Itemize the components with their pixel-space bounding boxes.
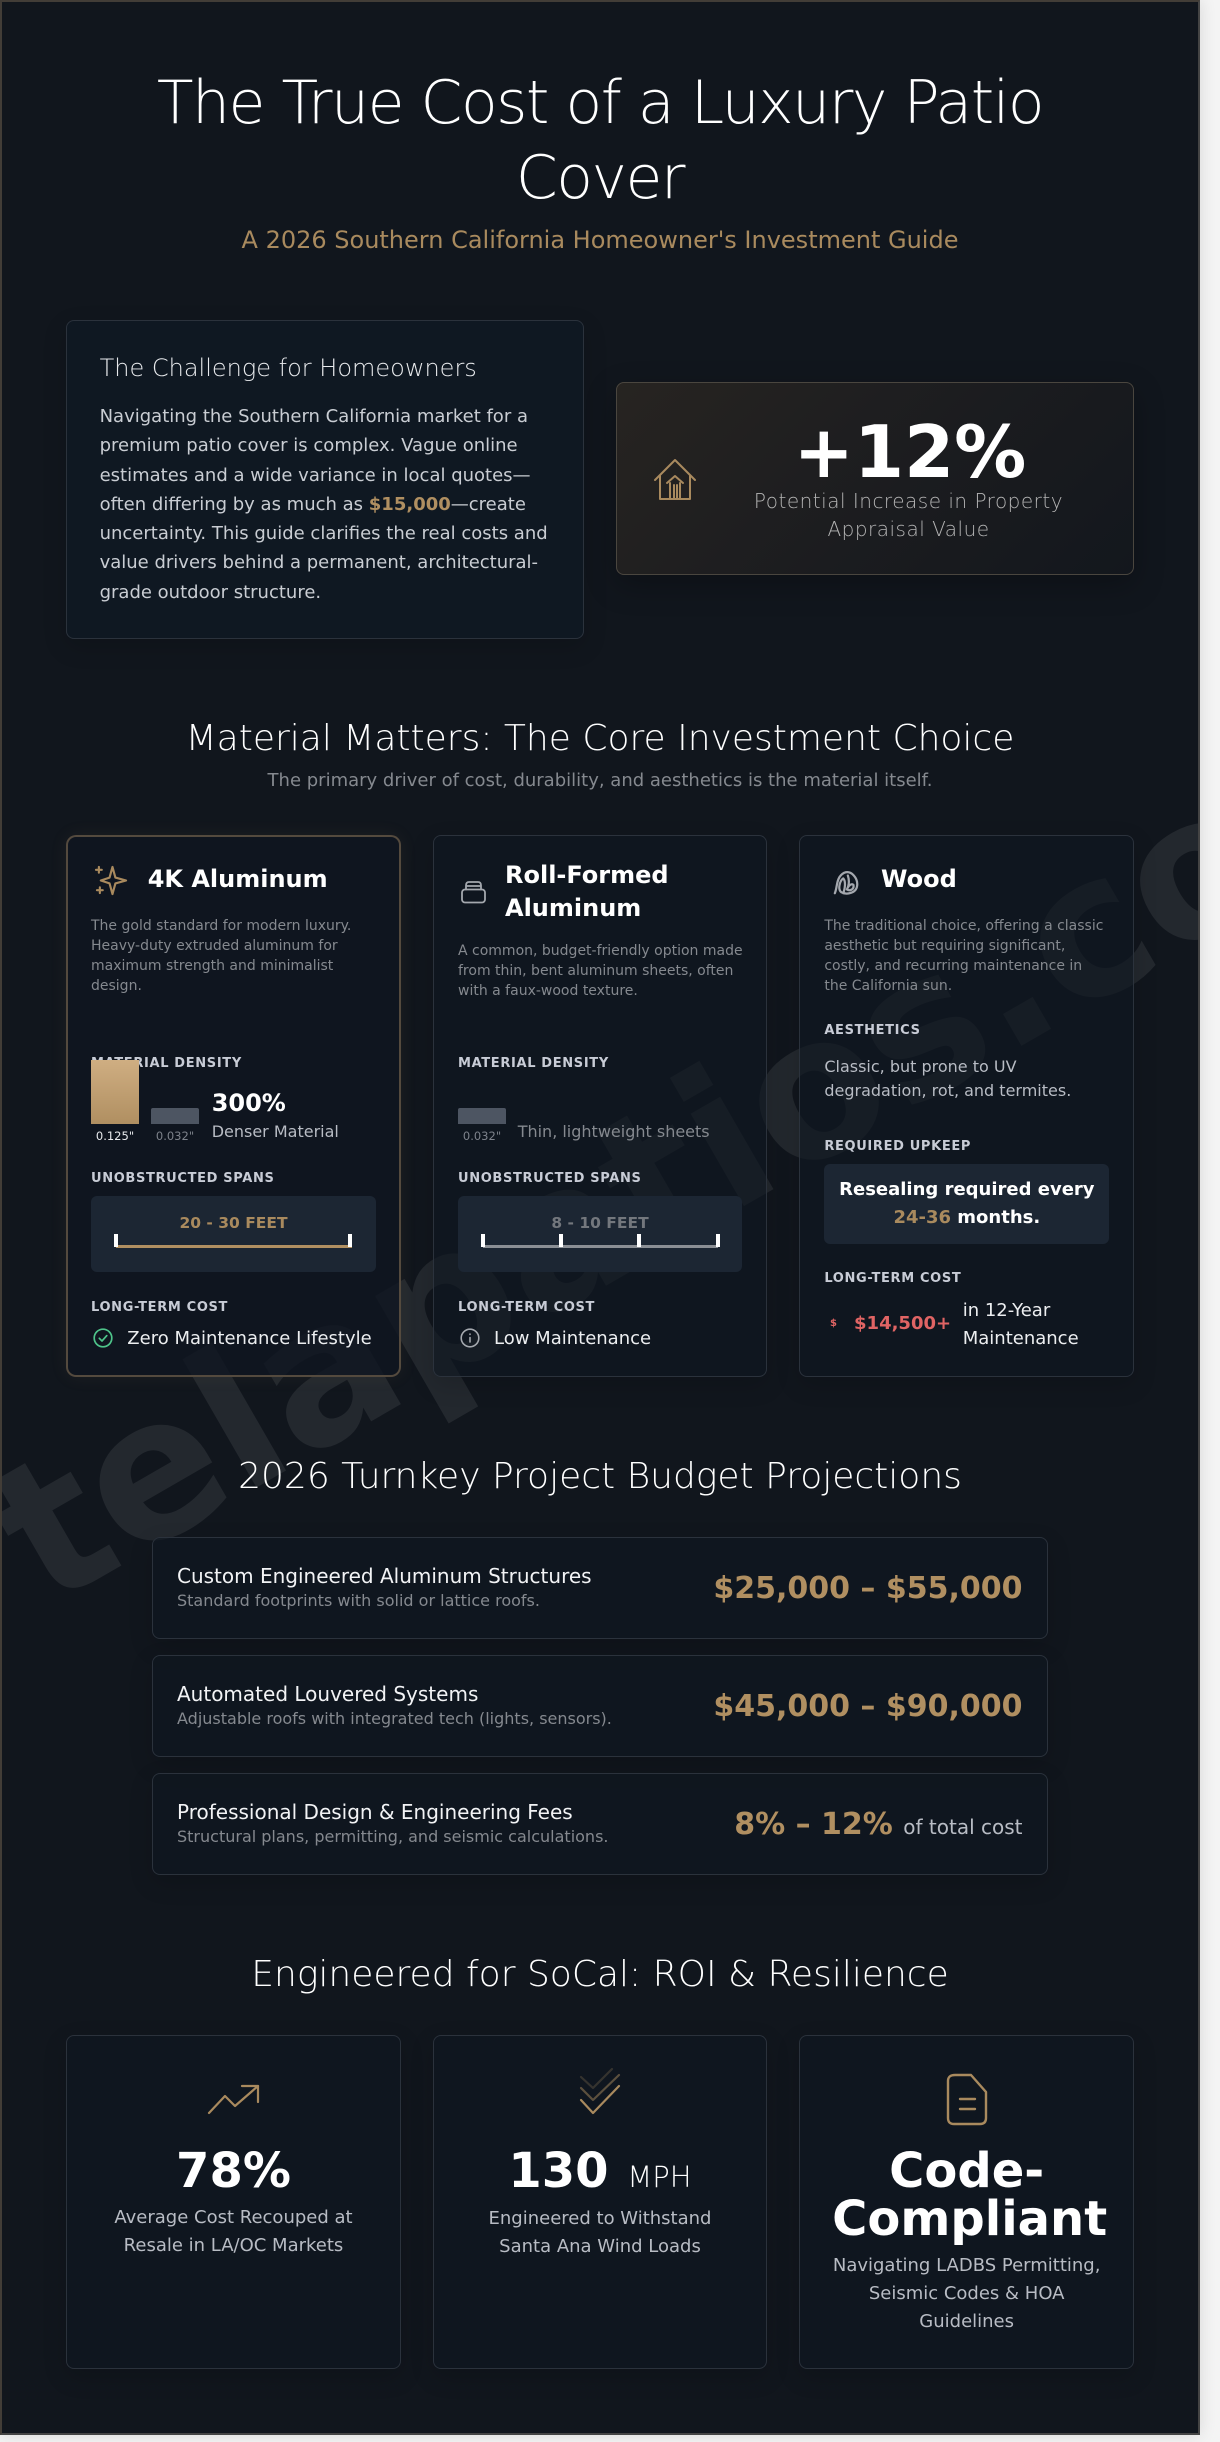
text: Average Cost Recouped at — [114, 2207, 353, 2228]
text: aesthetics: Classic, but prone to UV — [824, 1057, 1017, 1076]
label: long-term cost: LONG-TERM COST — [824, 1271, 961, 1286]
label: aesthetics: AESTHETICS — [824, 1023, 921, 1038]
text — [489, 2208, 711, 2257]
text: Resale in LA/OC Markets — [124, 2235, 343, 2256]
title — [157, 68, 1043, 213]
icon: sparkles — [94, 866, 128, 896]
text: challenge body: Navigating the Southern California market for a — [100, 406, 528, 427]
label: material density: MATERIAL DENSITY — [458, 1056, 609, 1071]
bar label: 0.032" — [156, 1129, 194, 1143]
icon: chevrons — [580, 2068, 620, 2114]
subtitle: A 2026 Southern California Homeowner's Investment Guide — [242, 226, 958, 254]
title: Cover — [516, 143, 684, 213]
text: challenge body: often differing by as much as $15,000—create — [100, 494, 526, 515]
description: from thin, bent aluminum sheets, often — [458, 962, 733, 978]
heading: Aluminum — [505, 894, 641, 922]
stat: 300%: 300% — [212, 1089, 286, 1117]
text: denser material: Denser Material — [212, 1122, 339, 1141]
row price: $45,000 – $90,000 — [713, 1689, 1022, 1724]
text: Santa Ana Wind Loads — [499, 2236, 701, 2257]
panel: challenge for homeowners — [66, 320, 584, 639]
panel: property appraisal stat — [616, 382, 1134, 575]
icon: info circle — [460, 1328, 480, 1348]
description — [824, 918, 1103, 994]
bar label: 0.125" — [96, 1129, 134, 1143]
panel: 4K aluminum — [66, 835, 401, 1377]
label: spans: UNOBSTRUCTED SPANS — [458, 1171, 642, 1186]
row title: Professional Design & Engineering Fees — [177, 1800, 573, 1824]
ruler — [483, 1245, 718, 1248]
stat label: Appraisal Value — [827, 517, 990, 541]
bar: 0.032 inch — [151, 1108, 199, 1124]
description: A common, budget-friendly option made — [458, 942, 743, 958]
text: challenge body: premium patio cover is complex. Vague online — [100, 435, 518, 456]
description: design. — [91, 978, 142, 994]
panel: roll-formed aluminum — [433, 835, 767, 1377]
icon: stacked layers — [461, 881, 486, 904]
panel: wind load — [433, 2035, 767, 2369]
label: long-term cost: LONG-TERM COST — [91, 1300, 228, 1315]
row price: 8% – 12% of total cost — [734, 1807, 1022, 1842]
panel: code compliant — [799, 2035, 1134, 2369]
callout: resealing: 24-36 months. — [893, 1207, 1040, 1228]
heading: 4K Aluminum — [148, 865, 328, 893]
description: The traditional choice, offering a classic — [824, 918, 1103, 934]
row note: Adjustable roofs with integrated tech (lights, sensors). — [177, 1709, 612, 1728]
heading: material matters: Material Matters: The Core Investment Choice — [186, 718, 1014, 758]
panel: budget row 2 — [152, 1655, 1048, 1757]
heading: challenge: The Challenge for Homeowners — [100, 354, 477, 382]
panel: cost recouped — [66, 2035, 401, 2369]
panel: budget row 3 — [152, 1773, 1048, 1875]
icon: wood rings — [834, 871, 858, 895]
text: challenge body: uncertainty. This guide clarifies the real costs and — [100, 523, 548, 544]
text: maintenance: Low Maintenance — [494, 1328, 651, 1349]
icon: trending up — [208, 2084, 260, 2114]
description: the California sun. — [824, 978, 952, 994]
text: maintenance: Zero Maintenance Lifestyle — [127, 1328, 372, 1349]
stat value: +12% — [794, 410, 1026, 494]
stat label: Potential Increase in Property — [754, 489, 1063, 513]
title: The True Cost of a Luxury Patio — [157, 68, 1043, 138]
text: aesthetics — [824, 1057, 1071, 1100]
text: challenge body: grade outdoor structure. — [100, 582, 321, 602]
stat: 130 MPH — [508, 2143, 692, 2199]
text: Navigating LADBS Permitting, — [833, 2255, 1100, 2276]
heading — [505, 861, 669, 922]
description: aesthetic but requiring significant, — [824, 938, 1065, 954]
description: The gold standard for modern luxury. — [91, 918, 351, 934]
icon: dollar: $ — [830, 1318, 837, 1328]
bar label: 0.032" — [463, 1129, 501, 1143]
heading: budget: 2026 Turnkey Project Budget Projections — [238, 1456, 962, 1497]
row note: Structural plans, permitting, and seismic calculations. — [177, 1827, 608, 1846]
span diagram — [91, 1196, 376, 1272]
description: with a faux-wood texture. — [458, 982, 638, 998]
label: material density: MATERIAL DENSITY — [91, 1056, 242, 1071]
cost note: in 12-Year — [963, 1300, 1050, 1321]
span value: 20 - 30 FEET — [179, 1214, 288, 1232]
callout: resealing: Resealing required every — [839, 1179, 1095, 1200]
description: maximum strength and minimalist — [91, 958, 333, 974]
label: spans: UNOBSTRUCTED SPANS — [91, 1171, 274, 1186]
text: material subtitle: The primary driver of cost, durability, and aesthetics is the material itself. — [268, 770, 932, 790]
icon: document — [946, 2074, 988, 2126]
heading: Wood — [881, 865, 957, 893]
row price: $25,000 – $55,000 — [713, 1571, 1022, 1606]
text: challenge body — [100, 406, 548, 602]
label: upkeep: REQUIRED UPKEEP — [824, 1138, 971, 1154]
text — [833, 2255, 1100, 2332]
text: Guidelines — [919, 2311, 1014, 2332]
panel: wood — [799, 835, 1134, 1377]
icon: check circle — [93, 1328, 113, 1348]
panel: budget row 1 — [152, 1537, 1048, 1639]
text: aesthetics: degradation, rot, and termites. — [824, 1081, 1071, 1100]
description: Heavy-duty extruded aluminum for — [91, 938, 338, 954]
row title: Automated Louvered Systems — [177, 1682, 478, 1706]
stat: Compliant — [832, 2191, 1107, 2247]
text: challenge body: estimates and a wide variance in local quotes— — [100, 464, 531, 486]
callout: resealing — [824, 1164, 1109, 1244]
text: thin sheets: Thin, lightweight sheets — [518, 1122, 710, 1141]
ruler — [116, 1245, 352, 1248]
text: Engineered to Withstand — [489, 2208, 711, 2229]
bar: 0.032 inch — [458, 1108, 506, 1124]
cost value: $14,500+ — [854, 1313, 951, 1334]
cost note: Maintenance — [963, 1328, 1079, 1349]
text: Seismic Codes & HOA — [869, 2283, 1064, 2304]
bar: 0.125 inch — [91, 1060, 139, 1124]
row note: Standard footprints with solid or lattice roofs. — [177, 1591, 540, 1610]
span diagram — [458, 1196, 742, 1272]
heading: ROI: Engineered for SoCal: ROI & Resilience — [251, 1954, 949, 1995]
description — [458, 942, 743, 998]
stat: 78% — [176, 2143, 291, 2199]
span value: 8 - 10 FEET — [551, 1214, 649, 1232]
cost note — [963, 1300, 1079, 1349]
stat: Code- — [889, 2143, 1044, 2199]
description: costly, and recurring maintenance in — [824, 958, 1082, 974]
stat — [832, 2143, 1107, 2247]
stat label — [754, 489, 1063, 541]
label: long-term cost: LONG-TERM COST — [458, 1300, 595, 1315]
text — [114, 2207, 353, 2256]
icon: house — [654, 459, 696, 500]
description — [90, 918, 351, 994]
text: challenge body: value drivers behind a permanent, architectural- — [100, 552, 538, 573]
heading: Roll-Formed — [505, 861, 669, 889]
row title: Custom Engineered Aluminum Structures — [177, 1564, 592, 1588]
